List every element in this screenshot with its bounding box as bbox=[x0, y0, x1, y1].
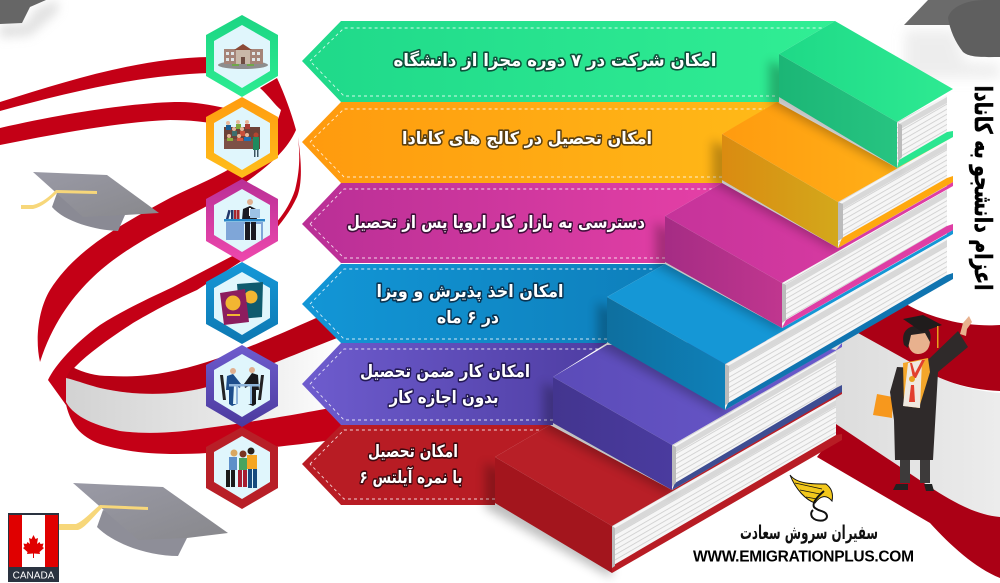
logo: wing emblem bbox=[790, 475, 832, 521]
hexagon: university building bbox=[206, 15, 278, 97]
text: item 2: امکان تحصیل در کالج های کانادا bbox=[402, 129, 652, 149]
banner: green bbox=[302, 21, 835, 102]
text: item 4 bbox=[376, 282, 564, 328]
text: item 5 bbox=[360, 362, 530, 408]
text: item 4: امکان اخذ پذیرش و ویزا bbox=[376, 282, 564, 302]
book: magenta bbox=[655, 182, 953, 332]
ribbon: right red and grey band bbox=[817, 304, 1000, 578]
banner: purple bbox=[302, 343, 607, 425]
icon: graduation cap top right bbox=[904, 0, 1000, 78]
text: item 4: در ۶ ماه bbox=[437, 308, 499, 328]
icon: graduation cap bottom left bbox=[59, 483, 228, 556]
logo: company name: سفیران سروش سعادت bbox=[740, 522, 878, 544]
title: vertical heading: اعزام دانشجو به کانادا bbox=[969, 86, 997, 290]
book: purple bbox=[543, 340, 842, 495]
text: item 6 bbox=[360, 442, 462, 488]
book: green bbox=[769, 21, 953, 172]
ribbon: left red swirl bbox=[0, 57, 345, 454]
banner: orange bbox=[302, 102, 780, 183]
icon: graduation cap top left bbox=[0, 0, 58, 38]
book: red bbox=[485, 390, 842, 578]
text: item 6: با نمره آیلتس ۶ bbox=[360, 466, 462, 488]
text: item 5: امکان کار ضمن تحصیل bbox=[360, 362, 530, 382]
hexagon: business meeting bbox=[206, 345, 278, 427]
book: orange bbox=[712, 102, 953, 252]
flag: Canada: CANADA bbox=[13, 570, 55, 582]
hexagon: students in class bbox=[206, 97, 278, 178]
banner: magenta bbox=[302, 183, 722, 263]
banner: blue bbox=[302, 264, 665, 343]
banner: red bbox=[302, 425, 550, 505]
book: blue bbox=[597, 230, 953, 415]
text: item 6: امکان تحصیل bbox=[368, 442, 458, 462]
text: item 1: امکان شرکت در ۷ دوره مجزا از دانشگاه bbox=[393, 50, 716, 71]
logo: website url: WWW.EMIGRATIONPLUS.COM bbox=[693, 548, 914, 566]
hexagon: office desk bbox=[206, 179, 278, 262]
text: item 5: بدون اجازه کار bbox=[389, 388, 498, 408]
hexagon: three students bbox=[206, 427, 278, 509]
hexagon: passports bbox=[206, 262, 278, 344]
icon: graduation cap middle left bbox=[21, 172, 159, 231]
figure: graduate bbox=[873, 315, 972, 491]
text: item 3: دسترسی به بازار کار اروپا پس از تحصیل bbox=[347, 213, 645, 233]
flag: Canada bbox=[8, 513, 59, 582]
